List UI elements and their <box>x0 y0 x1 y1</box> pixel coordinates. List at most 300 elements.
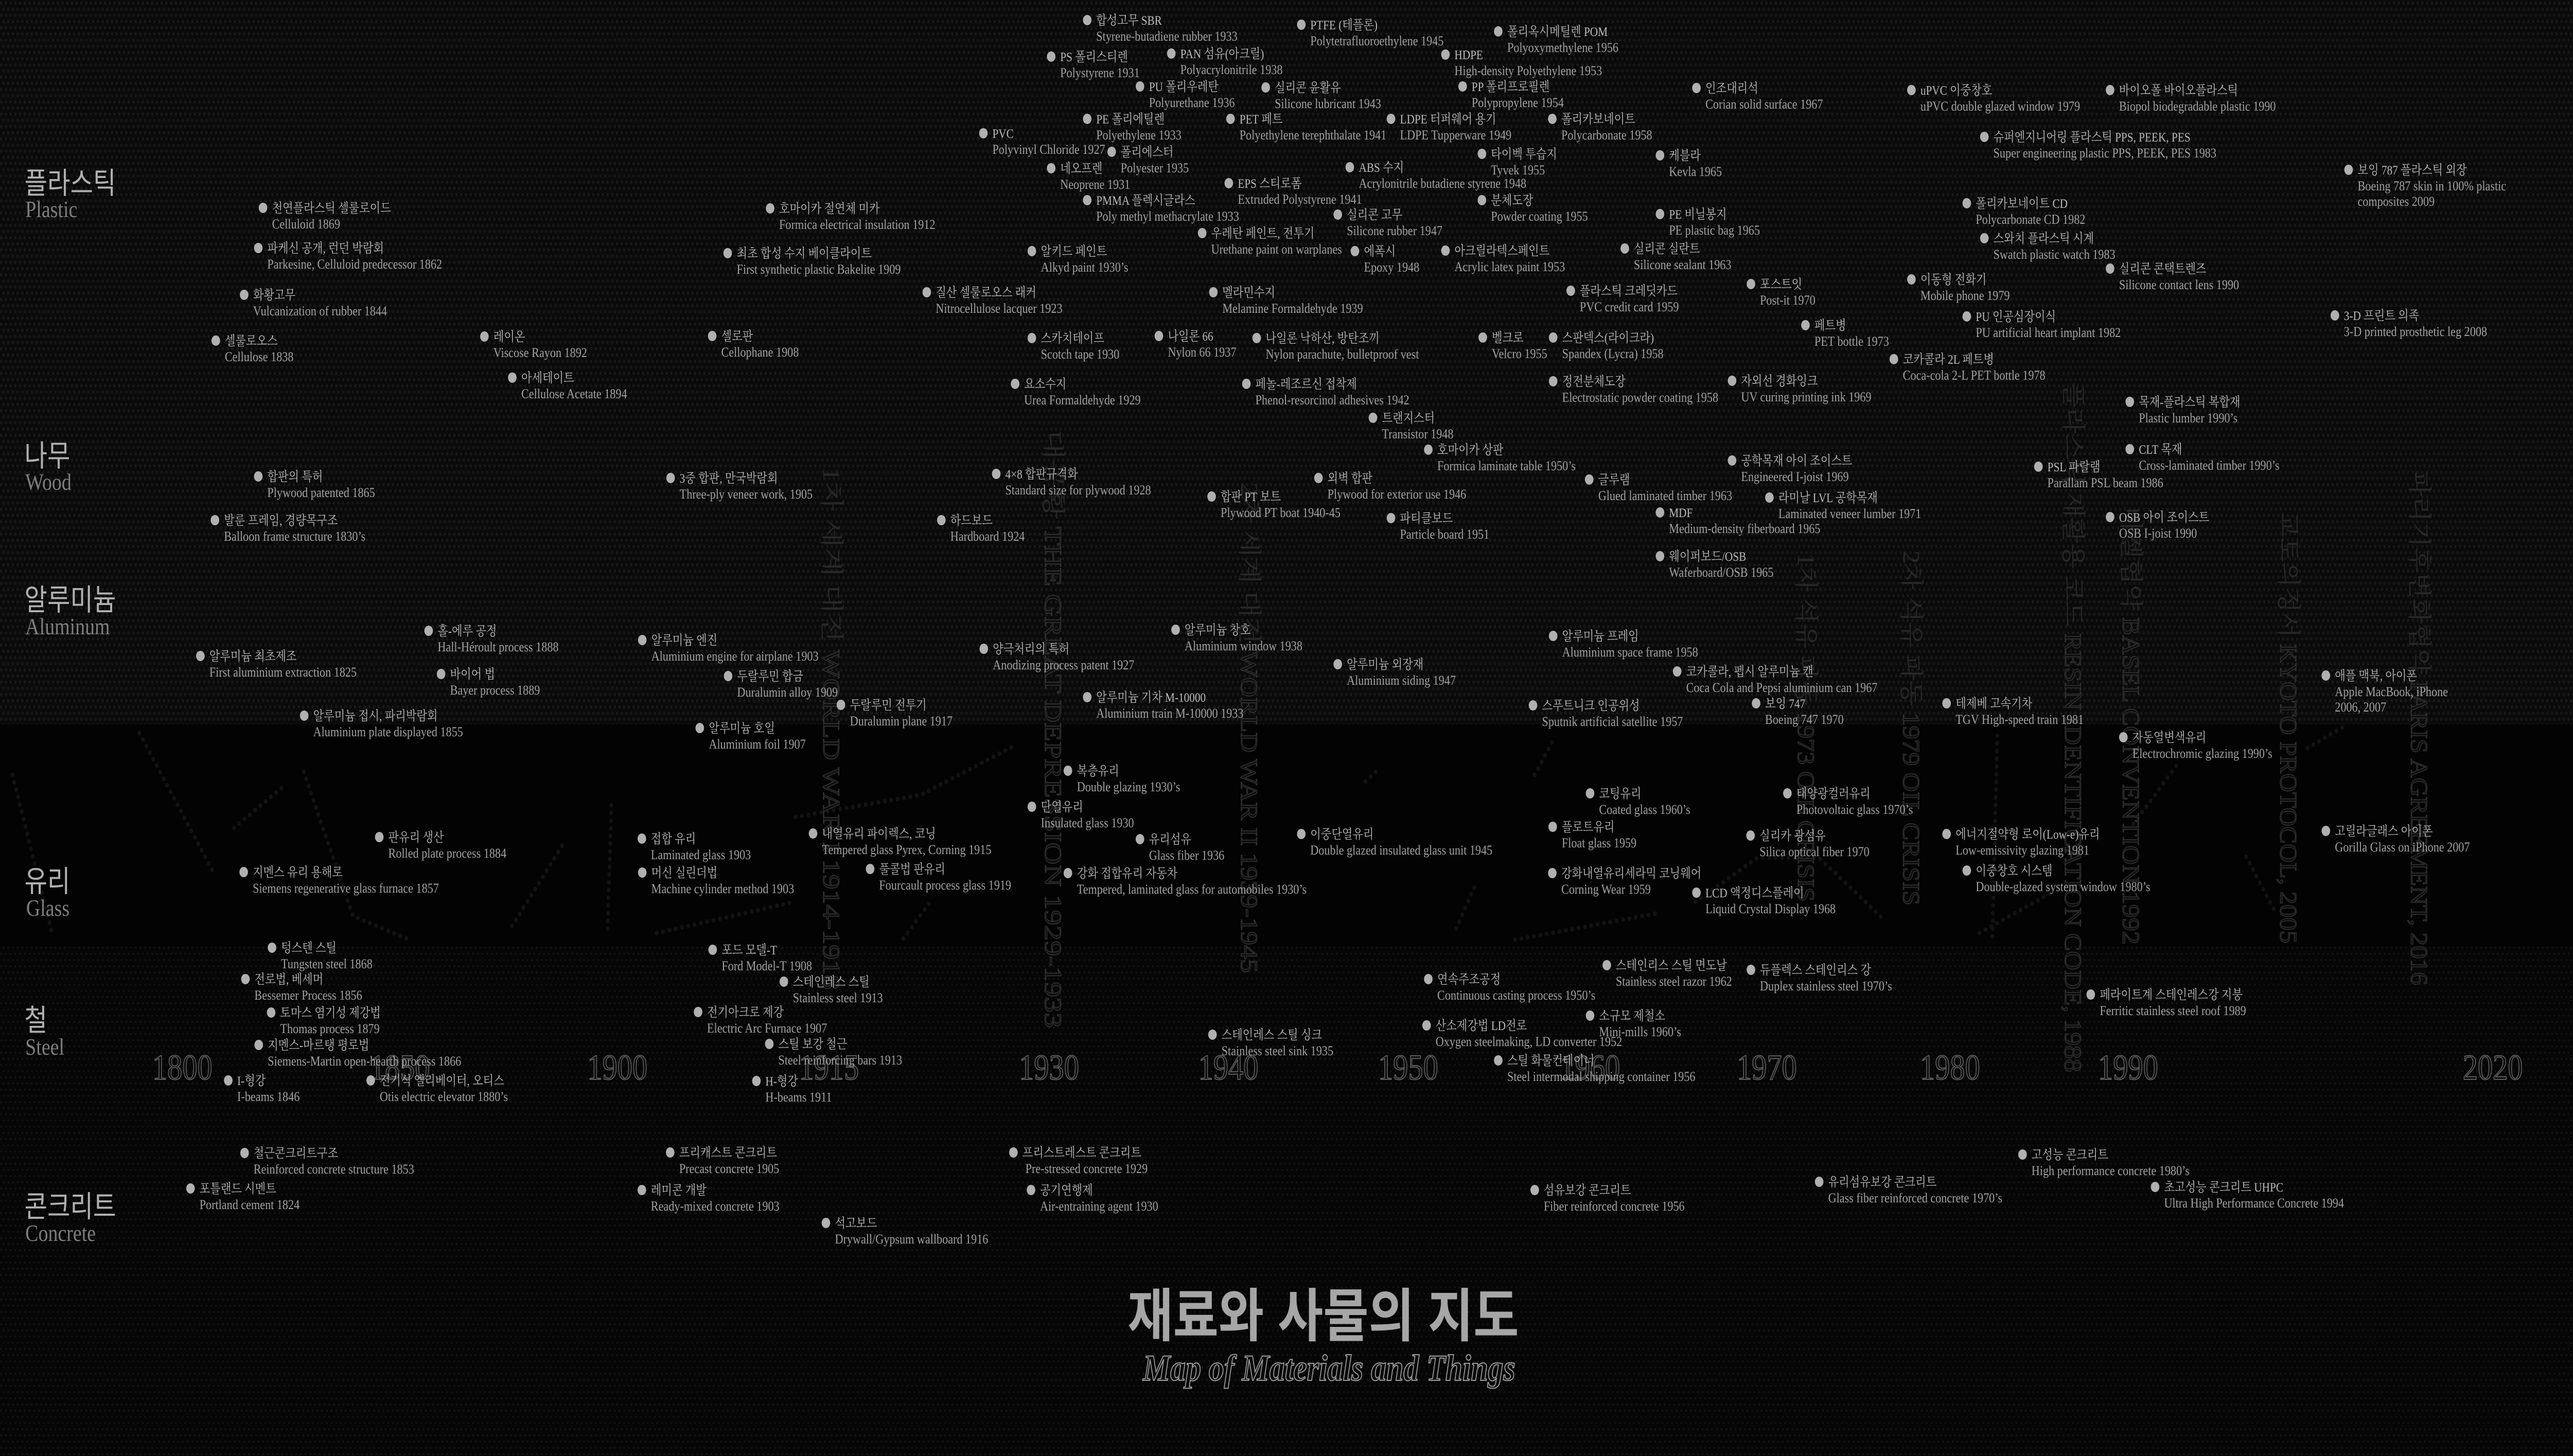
era label: 1979 oil crisis: 2차 석유 파동 1979 OIL CRISIS <box>1898 551 1924 905</box>
entry: SBR: 합성고무 SBR <box>1096 13 1162 28</box>
entry: Post-it: Post-it 1970 <box>1760 293 1816 308</box>
entry: Fourcault <box>866 862 1011 893</box>
category heading: Concrete <box>25 1191 116 1247</box>
entry: Fiber reinforced <box>1530 1183 1685 1214</box>
entry: Celluloid <box>259 201 391 232</box>
entry: 4x8 plywood: Standard size for plywood 1928 <box>1005 483 1151 498</box>
entry: Kevlar <box>1655 148 1722 180</box>
entry: Shipping container <box>1494 1053 1696 1085</box>
entry: Three-ply <box>666 471 813 502</box>
entry: Mobile phone: Mobile phone 1979 <box>1920 288 2010 304</box>
entry: Spandex <box>1549 330 1664 362</box>
timeline axis years: 1970 <box>1737 1047 1797 1087</box>
entry: Duralumin alloy: 두랄루민 합금 <box>737 669 803 684</box>
entry: Spandex: Spandex (Lycra) 1958 <box>1562 346 1664 362</box>
entry: Tungsten steel: Tungsten steel 1868 <box>281 956 373 972</box>
entry: Siemens furnace: Siemens regenerative glass furnace 1857 <box>253 881 439 896</box>
entry: Formica insulation: 호마이카 절연체 미카 <box>779 201 880 217</box>
entry: PVC credit card: 플라스틱 크레딧카드 <box>1580 283 1678 299</box>
entry: Neoprene: 네오프렌 <box>1060 161 1102 176</box>
entry: Epoxy: Epoxy 1948 <box>1364 260 1419 275</box>
entry: UHPC: 초고성능 콘크리트 UHPC <box>2164 1180 2283 1195</box>
entry: First aluminium: 알루미늄 최초제조 <box>209 649 297 664</box>
entry: Particle board: 파티클보드 <box>1400 511 1453 526</box>
entry: Acetate <box>508 370 627 402</box>
entry: PVC <box>979 127 1105 157</box>
entry: Aluminium plate: 알루미늄 접시, 파리박람회 <box>313 708 437 724</box>
entry: Swatch <box>1980 231 2116 262</box>
entry: Precast: 프리캐스트 콘크리트 <box>679 1145 777 1161</box>
category heading: Wood: Wood <box>25 470 72 495</box>
entry: Duplex <box>1747 963 1892 994</box>
entry: Silica fiber <box>1746 828 1870 860</box>
entry: Silicone lubricant: 실리콘 윤활유 <box>1275 80 1341 96</box>
entry: Powder coating: 분체도장 <box>1491 193 1534 208</box>
entry: Bessemer: 전로법, 베세머 <box>254 972 323 987</box>
entry: PU <box>1136 79 1235 111</box>
entry: Waferboard <box>1655 549 1773 580</box>
entry: Transistor: 트랜지스터 <box>1382 411 1435 426</box>
subtitle: Map of Materials and Things <box>1142 1348 1515 1389</box>
entry: Silicone sealant: 실리콘 실란트 <box>1634 241 1700 257</box>
entry: Duralumin plane: 두랄루민 전투기 <box>850 698 927 713</box>
entry: 3-D leg: 3-D 프린트 의족 <box>2344 308 2419 324</box>
entry: SBR: Styrene-butadiene rubber 1933 <box>1096 29 1238 44</box>
entry: Pre-stressed: 프리스트레스트 콘크리트 <box>1023 1145 1141 1161</box>
entry: Laminated glass: Laminated glass 1903 <box>651 847 751 863</box>
entry: Cellulose: 셀룰로오스 <box>225 333 278 349</box>
entry: Duralumin plane: Duralumin plane 1917 <box>850 714 953 729</box>
entry: Low-e: 에너지절약형 로이(Low-e)유리 <box>1955 827 2100 842</box>
entry: Ford Model-T <box>709 943 812 974</box>
entry: Boeing 787: Boeing 787 skin in 100% plastic <box>2357 179 2506 194</box>
entry: I-joist <box>1728 453 1853 485</box>
entry: Aluminium foil: 알루미늄 호일 <box>709 721 775 736</box>
entry: OSB I-joist: OSB I-joist 1990 <box>2119 526 2197 541</box>
entry: Aluminium plate: Aluminium plate displayed 1855 <box>313 724 463 740</box>
entry: Vulcanization <box>240 288 387 319</box>
entry: Silica fiber: Silica optical fiber 1970 <box>1759 844 1870 860</box>
entry: Glass fiber: 유리섬유 <box>1149 832 1191 847</box>
entry: Plywood PT boat: Plywood PT boat 1940-45 <box>1221 505 1341 521</box>
entry: PSL: PSL 파랄램 <box>2048 459 2100 475</box>
entry: Acrylic latex: 아크릴라텍스페인트 <box>1454 243 1549 259</box>
category heading: Glass: 유리 <box>25 865 70 898</box>
entry: Pyrex: 내열유리 파이렉스, 코닝 <box>822 826 936 842</box>
entry: Vulcanization: 화황고무 <box>253 288 295 303</box>
entry: Portland cement: Portland cement 1824 <box>200 1197 299 1213</box>
entry: High performance: 고성능 콘크리트 <box>2032 1147 2108 1163</box>
entry: Pyrex: Tempered glass Pyrex, Corning 1915 <box>822 842 991 858</box>
entry: Aluminium can: Coca Cola and Pepsi aluminium can 1967 <box>1686 680 1877 696</box>
entry: Stainless steel: Stainless steel 1913 <box>793 990 883 1006</box>
entry: Gorilla Glass: 고릴라글래스 아이폰 <box>2335 824 2433 839</box>
entry: PTFE: PTFE (테플론) <box>1310 17 1378 33</box>
entry: PE bag <box>1655 207 1760 238</box>
entry: HDPE: High-density Polyethylene 1953 <box>1454 63 1602 79</box>
entry: Continuous casting: 연속주조공정 <box>1437 972 1501 987</box>
entry: Steel sink: Stainless steel sink 1935 <box>1222 1043 1333 1059</box>
entry: Siemens-Martin: 지멘스-마르탱 평로법 <box>268 1038 369 1053</box>
entry: Tempered auto glass <box>1064 866 1307 897</box>
entry: Polyester: Polyester 1935 <box>1121 161 1189 176</box>
entry: PET felt <box>1226 112 1386 143</box>
entry: Air-entraining: Air-entraining agent 1930 <box>1040 1199 1158 1214</box>
entry: Kevlar: 케블라 <box>1669 148 1701 164</box>
entry: Ready-mix: 레미콘 개발 <box>651 1183 707 1198</box>
wood timeline entries <box>210 395 2280 580</box>
entry: Rayon <box>480 329 587 361</box>
entry: Biopol: 바이오폴 바이오플라스틱 <box>2119 83 2238 98</box>
entry: PU: PU 폴리우레탄 <box>1149 79 1219 95</box>
entry: Ferritic roof: Ferritic stainless steel roof 1989 <box>2100 1003 2246 1019</box>
entry: Electric arc furnace: 전기아크로 제강 <box>707 1005 784 1020</box>
era label: 1973 oil crisis: 1차 석유 파동 1973 OIL CRISIS <box>1792 553 1819 902</box>
entry: Celluloid: 천연플라스틱 셀룰로이드 <box>272 201 391 216</box>
entry: Bakelite <box>724 246 901 277</box>
entry: Contact lens: Silicone contact lens 1990 <box>2119 277 2239 293</box>
timeline axis years: 1850 <box>370 1047 430 1087</box>
entry: Glass fiber <box>1136 832 1224 863</box>
entry: Phenol-resorcinol: Phenol-resorcinol adhesives 1942 <box>1256 393 1409 408</box>
entry: Anodizing <box>979 642 1134 673</box>
entry: Steel sink <box>1208 1027 1333 1059</box>
entry: UHPC: Ultra High Performance Concrete 1994 <box>2164 1196 2344 1211</box>
timeline axis years: 1930 <box>1019 1047 1079 1087</box>
entry: Boeing 747: 보잉 747 <box>1765 696 1806 712</box>
entry: LDPE <box>1387 112 1511 143</box>
entry: Float glass: Float glass 1959 <box>1562 836 1636 851</box>
entry: PSL <box>2034 459 2163 491</box>
entry: PET bottle <box>1801 318 1889 349</box>
era label: Basel Convention: 바젤협약 BASEL CONVENTION 1992 <box>2118 507 2144 945</box>
entry: Hall-Heroult: 홀-에루 공정 <box>437 624 497 639</box>
entry: Urea <box>1011 377 1141 408</box>
category heading: Wood <box>25 440 72 495</box>
background: upper dotted band <box>0 0 2573 724</box>
entry: Parkesine: Parkesine, Celluloid predecessor 1862 <box>267 257 442 272</box>
entry: Otis elevator: Otis electric elevator 1880’s <box>380 1089 508 1105</box>
entry: Scotch tape <box>1028 331 1119 362</box>
entry: Aluminium window: Aluminium window 1938 <box>1185 638 1302 654</box>
entry: Pre-stressed: Pre-stressed concrete 1929 <box>1026 1161 1148 1177</box>
entry: EPS <box>1225 176 1362 207</box>
entry: Boeing 787: 보잉 787 플라스틱 외장 <box>2357 163 2467 178</box>
entry: PE bag: PE plastic bag 1965 <box>1669 223 1760 238</box>
entry: Phenol-resorcinol: 페놀-레조르신 접착제 <box>1256 377 1357 392</box>
entry: Urea: 요소수지 <box>1024 377 1066 392</box>
category heading: Wood: 나무 <box>25 440 70 473</box>
entry: Electric arc furnace: Electric Arc Furnace 1907 <box>707 1021 827 1036</box>
entry: Parkesine: 파케신 공개, 런던 박람회 <box>267 241 384 256</box>
entry: Polyester: 폴리에스터 <box>1121 145 1173 160</box>
entry: Mini-mills: Mini-mills 1960’s <box>1599 1024 1681 1040</box>
entry: Kevlar: Kevla 1965 <box>1669 164 1722 180</box>
entry: Laminated glass: 접합 유리 <box>651 831 696 847</box>
entry: Reinforced concrete <box>240 1146 414 1177</box>
entry: Mobile phone: 이동형 전화기 <box>1920 272 1986 288</box>
entry: Coated glass: Coated glass 1960’s <box>1599 802 1690 818</box>
entry: PE bag: PE 비닐봉지 <box>1669 207 1727 222</box>
entry: Formica table: 호마이카 상판 <box>1437 442 1504 458</box>
category heading: Plastic: Plastic <box>25 197 77 223</box>
entry: Rebars: 스틸 보강 철근 <box>778 1037 848 1052</box>
entry: Boeing 747 <box>1752 696 1844 727</box>
entry: OSB I-joist: OSB 아이 조이스트 <box>2119 510 2209 525</box>
entry: Contact lens <box>2106 261 2239 293</box>
entry: Phenol-resorcinol <box>1242 377 1409 408</box>
era label: Kyoto Protocol: 교토의정서 KYOTO PROTOCOL, 2005 <box>2275 512 2301 944</box>
entry: Post-it: 포스트잇 <box>1760 277 1802 292</box>
entry: Parkesine <box>254 241 442 272</box>
entry: Siemens furnace <box>239 865 439 896</box>
entry: Nitrocellulose <box>923 285 1063 316</box>
entry: PP: PP 폴리프로필렌 <box>1472 79 1549 95</box>
timeline axis years: 1800 <box>152 1047 213 1087</box>
entry: uPVC: uPVC 이중창호 <box>1920 83 1993 98</box>
entry: Duplex: Duplex stainless steel 1970’s <box>1760 979 1892 994</box>
entry: Aluminium can <box>1673 664 1877 696</box>
entry: PP <box>1458 79 1564 111</box>
entry: Post-it <box>1747 277 1816 308</box>
entry: Low-e: Low-emissivity glazing 1981 <box>1955 843 2089 858</box>
entry: Glass fiber reinforced <box>1815 1175 2002 1206</box>
era label: World War II: 2차 세계 대전 WORLD WAR II 1939-1945 <box>1236 483 1262 973</box>
entry: Apple <box>2321 668 2448 715</box>
entry: PE: PE 폴리에틸렌 <box>1096 112 1165 127</box>
entry: I-beams: I-beams 1846 <box>237 1089 299 1105</box>
entry: Powder coating <box>1477 193 1588 224</box>
entry: Tungsten steel <box>268 940 373 972</box>
entry: CLT <box>2125 442 2280 473</box>
entry: PET bottle: PET bottle 1973 <box>1814 334 1889 349</box>
entry: Velcro: 벨크로 <box>1492 330 1524 346</box>
title: 재료와 사물의 지도 <box>1127 1284 1519 1348</box>
entry: Nylon parachute: Nylon parachute, bulletproof vest <box>1266 347 1419 362</box>
entry: Precast <box>666 1145 779 1177</box>
entry: Formica table <box>1424 442 1576 474</box>
entry: Fiber reinforced: Fiber reinforced concrete 1956 <box>1544 1199 1685 1214</box>
entry: Bakelite: 최초 합성 수지 베이클라이트 <box>737 246 872 261</box>
entry: Cellulose <box>212 333 293 365</box>
entry: Polycarbonate: 폴리카보네이트 <box>1561 112 1635 127</box>
entry: Corning Wear: 강화내열유리세라믹 코닝웨어 <box>1561 866 1701 881</box>
entry: Pre-stressed <box>1009 1145 1148 1177</box>
entry: Boeing 787 <box>2345 163 2506 209</box>
entry: Bakelite: First synthetic plastic Bakelite 1909 <box>737 262 901 277</box>
entry: Alkyd paint: Alkyd paint 1930’s <box>1041 260 1129 275</box>
entry: Mobile phone <box>1907 272 2010 304</box>
entry: uPVC <box>1907 83 2080 114</box>
era label: Paris Agreement: 파리기후변화협약 PARIS AGREEMENT, 2016 <box>2406 471 2432 985</box>
entry: Space frame <box>1549 629 1698 660</box>
entry: Stainless steel: 스테인레스 스틸 <box>793 974 870 990</box>
entry: OSB I-joist <box>2106 510 2209 541</box>
entry: Electrochromic: 자동열변색유리 <box>2133 730 2206 745</box>
entry: LVL <box>1765 490 1921 522</box>
entry: Waferboard: 웨이퍼보드/OSB <box>1669 549 1746 564</box>
entry: Glulam: 글루램 <box>1598 472 1630 488</box>
entry: Duplex: 듀플렉스 스테인리스 강 <box>1760 963 1871 978</box>
entry: Tyvek: 타이벡 투습지 <box>1491 147 1557 162</box>
entry: Bayer <box>437 667 540 698</box>
entry: Biopol <box>2106 83 2276 114</box>
entry: Double glazing <box>1064 763 1180 795</box>
entry: Neoprene: Neoprene 1931 <box>1060 177 1130 192</box>
timeline axis years: 1915 <box>799 1047 859 1087</box>
era label: World War I: 1차 세계 대전 WORLD WAR I 1914-1918 <box>818 467 844 990</box>
entry: Aluminium siding <box>1333 657 1456 688</box>
entry: Ford Model-T: 포드 모델-T <box>721 943 777 958</box>
entry: Contact lens: 실리콘 콘택트렌즈 <box>2119 261 2207 277</box>
entry: Polycarbonate <box>1548 112 1652 143</box>
entry: PVC: PVC <box>992 127 1014 141</box>
entry: TGV <box>1942 696 2084 727</box>
entry: Aluminium train: Aluminium train M-10000 1933 <box>1096 706 1243 721</box>
entry: Coca-cola PET: Coca-cola 2-L PET bottle 1978 <box>1903 368 2046 383</box>
entry: Insulated glass: Insulated glass 1930 <box>1041 815 1134 831</box>
entry: ABS <box>1346 160 1526 191</box>
background: lower dotted band <box>0 947 2573 1456</box>
entry: PET bottle: 페트병 <box>1814 318 1846 333</box>
entry: MDF: Medium-density fiberboard 1965 <box>1669 521 1820 537</box>
entry: Electrostatic powder: 정전분체도장 <box>1562 374 1626 389</box>
entry: Reinforced concrete: 철근콘크리트구조 <box>254 1146 338 1161</box>
entry: Nylon 66: 나일론 66 <box>1168 329 1213 344</box>
entry: Otis elevator <box>366 1073 508 1105</box>
entry: Particle board: Particle board 1951 <box>1400 527 1489 542</box>
entry: Corning Wear: Corning Wear 1959 <box>1561 882 1651 897</box>
entry: Insulated glass <box>1028 800 1134 831</box>
entry: LVL: 라미날 LVL 공학목재 <box>1778 490 1878 506</box>
entry: H-beams: H-beams 1911 <box>765 1090 832 1105</box>
timeline axis years: 1990 <box>2098 1047 2158 1087</box>
entry: Photovoltaic glass: Photovoltaic glass 1970’s <box>1796 802 1913 818</box>
entry: Aluminium can: 코카콜라, 펩시 알루미늄 캔 <box>1686 664 1813 680</box>
entry: Razor: 스테인리스 스틸 면도날 <box>1616 958 1727 973</box>
entry: Urethane paint: Urethane paint on warplanes <box>1211 242 1342 257</box>
entry: Silicone rubber: 실리콘 고무 <box>1347 207 1402 223</box>
entry: Thomas: 토마스 염기성 제강법 <box>280 1005 381 1021</box>
entry: Coca-cola PET <box>1890 352 2046 383</box>
entry: Razor: Stainless steel razor 1962 <box>1616 974 1732 989</box>
entry: PAN: PAN 섬유(아크릴) <box>1180 46 1264 62</box>
timeline axis years: 1900 <box>587 1047 647 1087</box>
entry: Bayer: Bayer process 1889 <box>450 683 540 698</box>
entry: Spandex: 스판덱스(라이크라) <box>1562 330 1654 346</box>
entry: I-beams: I-형강 <box>237 1073 266 1089</box>
timeline axis years: 1980 <box>1920 1047 1980 1087</box>
faint dotted structure drawing in middle band <box>12 727 2342 943</box>
entry: Waferboard: Waferboard/OSB 1965 <box>1669 565 1773 580</box>
entry: Siemens-Martin <box>254 1038 461 1069</box>
entry: UHPC <box>2151 1180 2344 1211</box>
entry: First aluminium <box>196 649 357 680</box>
entry: Coated glass: 코팅유리 <box>1599 786 1642 802</box>
entry: Steel sink: 스테인레스 스틸 싱크 <box>1222 1027 1322 1043</box>
entry: Sputnik: Sputnik artificial satellite 1957 <box>1542 714 1683 730</box>
entry: PE: Polyethylene 1933 <box>1096 128 1182 143</box>
entry: Electrochromic: Electrochromic glazing 1990’s <box>2133 746 2272 761</box>
entry: First aluminium: First aluminium extraction 1825 <box>209 665 357 680</box>
entry: Drywall <box>822 1216 988 1247</box>
entry: CLT: CLT 목재 <box>2139 442 2182 457</box>
entry: Velcro: Velcro 1955 <box>1492 346 1547 362</box>
entry: Alkyd paint: 알키드 페인트 <box>1041 244 1107 259</box>
category heading: Steel: Steel <box>25 1035 64 1060</box>
entry: Anodizing: 양극처리의 특허 <box>993 642 1069 657</box>
category heading: Aluminum <box>25 584 116 640</box>
entry: Glass fiber reinforced: 유리섬유보강 콘크리트 <box>1828 1175 1937 1190</box>
entry: Glass fiber reinforced: Glass fiber reinforced concrete 1970’s <box>1828 1191 2002 1206</box>
entry: Plywood patented <box>254 469 375 501</box>
entry: PVC credit card: PVC credit card 1959 <box>1580 299 1679 315</box>
entry: Swatch: 스와치 플라스틱 시계 <box>1994 231 2094 246</box>
entry: Fourcault: 풀콜법 판유리 <box>879 862 945 877</box>
entry: Aluminium foil: Aluminium foil 1907 <box>709 737 806 752</box>
entry: Corian: Corian solid surface 1967 <box>1705 97 1823 112</box>
entry: Aluminium siding: Aluminium siding 1947 <box>1347 673 1456 688</box>
entry: Formica insulation: Formica electrical insulation 1912 <box>779 217 935 233</box>
entry: TGV: 테제베 고속기차 <box>1955 696 2033 712</box>
entry: Velcro <box>1478 330 1547 362</box>
entry: Rebars <box>765 1037 902 1068</box>
entry: Fiber reinforced: 섬유보강 콘크리트 <box>1544 1183 1631 1198</box>
entry: 4x8 plywood <box>992 467 1151 498</box>
entry: Portland cement: 포틀랜드 시멘트 <box>200 1181 276 1197</box>
entry: Three-ply: 3중 합판, 만국박람회 <box>680 471 778 486</box>
entry: PU heart <box>1963 309 2121 341</box>
entry: PS: Polystyrene 1931 <box>1060 65 1140 81</box>
entry: Balloon frame <box>210 513 365 544</box>
entry: Three-ply: Three-ply veneer work, 1905 <box>680 487 813 502</box>
entry: I-joist: 공학목재 아이 조이스트 <box>1741 453 1853 469</box>
entry: Precast: Precast concrete 1905 <box>679 1161 779 1177</box>
entry: Silicone rubber <box>1333 207 1442 239</box>
entry: Tyvek <box>1477 147 1557 178</box>
entry: Oxygen steelmaking: 산소제강법 LD전로 <box>1436 1018 1527 1034</box>
entry: Photovoltaic glass: 태양광컬러유리 <box>1796 786 1871 802</box>
category heading: Aluminum: 알루미늄 <box>25 584 116 617</box>
entry: Shipping container: 스틸 화물컨테이너 <box>1507 1053 1595 1069</box>
entry: Polycarbonate CD <box>1963 196 2085 227</box>
entry: Aluminium train <box>1083 690 1243 721</box>
entry: Tyvek: Tyvek 1955 <box>1491 163 1545 178</box>
entry: Acetate: 아세테이트 <box>521 370 574 386</box>
entry: Polycarbonate: Polycarbonate 1958 <box>1561 128 1652 143</box>
entry: Balloon frame: Balloon frame structure 1830’s <box>224 529 365 544</box>
entry: Duralumin plane <box>837 698 953 729</box>
entry: Low-e <box>1942 827 2100 858</box>
entry: Fourcault: Fourcault process glass 1919 <box>879 878 1011 893</box>
entry: Duralumin alloy <box>724 669 838 700</box>
entry: Tungsten steel: 텅스텐 스틸 <box>281 940 337 956</box>
entry: Aluminium window: 알루미늄 창호 <box>1185 623 1251 638</box>
entry: Double glazed IGU <box>1297 827 1492 858</box>
entry: Nylon 66: Nylon 66 1937 <box>1168 345 1236 360</box>
entry: Boeing 747: Boeing 747 1970 <box>1765 712 1844 727</box>
entry: Balloon frame: 발룬 프레임, 경량목구조 <box>224 513 338 528</box>
entry: PS <box>1047 49 1140 81</box>
entry: Plywood PT boat <box>1207 489 1341 521</box>
entry: I-beams <box>224 1073 299 1105</box>
entry: Stainless steel <box>780 974 883 1006</box>
entry: Melamine <box>1209 285 1363 316</box>
entry: Cellophane: Cellophane 1908 <box>721 345 799 360</box>
entry: Duralumin alloy: Duralumin alloy 1909 <box>737 685 838 700</box>
entry: Siemens furnace: 지멘스 유리 용해로 <box>253 865 343 880</box>
entry: Bayer: 바이어 법 <box>450 667 495 682</box>
